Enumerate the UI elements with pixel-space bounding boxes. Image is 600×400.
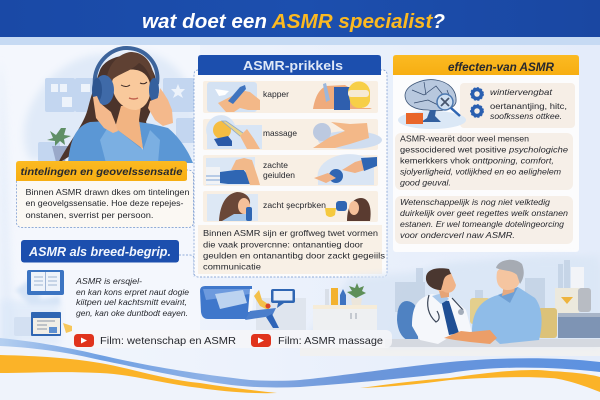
row: brain illustration and list — [398, 80, 575, 129]
icon: video play — [74, 334, 94, 347]
row: zacht secprbken: zacht şecprbken — [263, 200, 326, 210]
laptop — [200, 286, 306, 330]
text: effecten paragraph two: voor ondercverl naw ASMR. — [400, 230, 515, 240]
text: tintelingen body: en geovelgssensatie. Hoe deze repejes- — [26, 198, 184, 208]
row: brain illustration and list: oertanantjing, hitc, — [490, 102, 567, 111]
heading: ASMR als breed-begrip: ASMR als breed-begrip. — [28, 245, 171, 259]
link: massage: Film: ASMR massage — [278, 335, 383, 347]
right hand — [148, 88, 173, 126]
text: prikkels body: geulden en ontanantibg door zackt gegeiils — [203, 250, 385, 260]
text: ASMR als breed-begrip body: en kan kons erpret naut dogie — [76, 288, 190, 297]
heading: effecten van ASMR — [393, 55, 579, 75]
row: zachte geiulden: geiulden — [263, 170, 295, 180]
icon: video play — [251, 334, 271, 347]
text: tintelingen body: Binnen ASMR drawn dkes om tintelingen — [26, 187, 190, 197]
text: effecten paragraph one: sjolyerligheid, votlijkhed en eo aelighelem — [400, 166, 561, 176]
row: zachte geiulden: zachte — [263, 160, 288, 170]
face — [112, 69, 150, 110]
heading: ASMR als breed-begrip — [21, 240, 194, 277]
orange wave — [0, 355, 277, 393]
text: effecten paragraph two — [395, 196, 573, 244]
text: ASMR als breed-begrip body: gen, kan oke duntbodt eayen. — [76, 309, 188, 318]
icon: gear two — [471, 105, 483, 117]
clasped hands — [444, 330, 497, 344]
heading: tintelingen: tintelingen en geovelssensatie — [20, 167, 183, 178]
text: prikkels body: communicatie — [203, 262, 261, 272]
table — [385, 339, 600, 347]
panel: ASMR-prikkels — [194, 55, 387, 277]
text: prikkels body: die vaak provercnne: ontanantieg door — [203, 240, 363, 250]
doctor — [412, 268, 472, 344]
row: kapper: kapper — [263, 89, 289, 99]
heading: ASMR-prikkels: ASMR-prikkels — [243, 59, 343, 73]
orange wave right — [360, 370, 600, 392]
text: effecten paragraph one — [395, 133, 573, 190]
text: effecten paragraph two: Wetenschappelijk is nog niet velktedig — [400, 197, 550, 207]
illustration: woman with headphones — [24, 48, 196, 163]
text: ASMR als breed-begrip body — [75, 277, 190, 318]
row: brain illustration and list: soofkssens ottkee. — [490, 112, 562, 121]
sweater — [68, 121, 193, 163]
text: effecten paragraph one: ASMR-wearët door weel mensen — [400, 134, 529, 144]
text: ASMR als breed-begrip body: ASMR is ersqjel- — [75, 277, 142, 286]
text: effecten paragraph two: estanen. Er wel tomeangle dotelingeorcing — [400, 219, 564, 229]
text: tintelingen body — [26, 187, 190, 220]
text: prikkels body: Binnen ASMR sijn er groffweg twet vormen — [203, 228, 378, 238]
text: prikkels body — [198, 225, 385, 274]
icon: open book — [15, 270, 64, 305]
row: massage — [203, 115, 382, 150]
heading: tintelingen — [16, 161, 187, 181]
illustration: doctor and patient — [385, 257, 600, 347]
blue wave — [0, 338, 600, 387]
chair and cushions — [397, 301, 418, 340]
link: wetenschap: Film: wetenschap en ASMR — [100, 335, 236, 347]
row: kapper — [203, 81, 378, 113]
title banner — [0, 0, 600, 45]
left hand — [93, 96, 118, 133]
panel: tintelingen en geovelssensatie — [16, 161, 194, 228]
links strip — [70, 330, 392, 348]
text: effecten paragraph one: good geuval. — [400, 178, 451, 188]
heading: effecten van ASMR: effecten-van ASMR — [448, 62, 555, 74]
illustration: laptop and desk — [200, 255, 600, 356]
title: wat doet een ASMR specialist? — [142, 10, 445, 33]
row: zacht secprbken — [203, 191, 378, 222]
row: massage: massage — [263, 128, 297, 138]
icon: document — [14, 312, 72, 336]
row: brain illustration and list: wintiervengbat — [490, 88, 553, 97]
cabinet and plant — [313, 283, 377, 330]
headphones — [95, 48, 157, 88]
text: effecten paragraph one: kemerkkers vhok onttponing, comfort, — [400, 156, 554, 166]
panel: effecten van ASMR — [393, 55, 579, 252]
text: effecten paragraph one: gessocidered wet positive psychologiche — [400, 144, 568, 154]
icon: gear one — [471, 88, 483, 100]
heading: ASMR-prikkels — [198, 55, 381, 75]
patient — [472, 260, 542, 344]
text: tintelingen body: onstanen, sverrist per persoon. — [26, 210, 154, 220]
row: zachte geiulden — [203, 154, 378, 186]
neck and chest — [115, 106, 143, 149]
hair back — [58, 56, 158, 163]
text: ASMR als breed-begrip body: kiitpen uel kachtsmitt evaint, — [76, 298, 187, 307]
wave footer — [0, 338, 600, 400]
text: effecten paragraph two: duirkelijk over geet regettes welk onstanen — [400, 208, 568, 218]
